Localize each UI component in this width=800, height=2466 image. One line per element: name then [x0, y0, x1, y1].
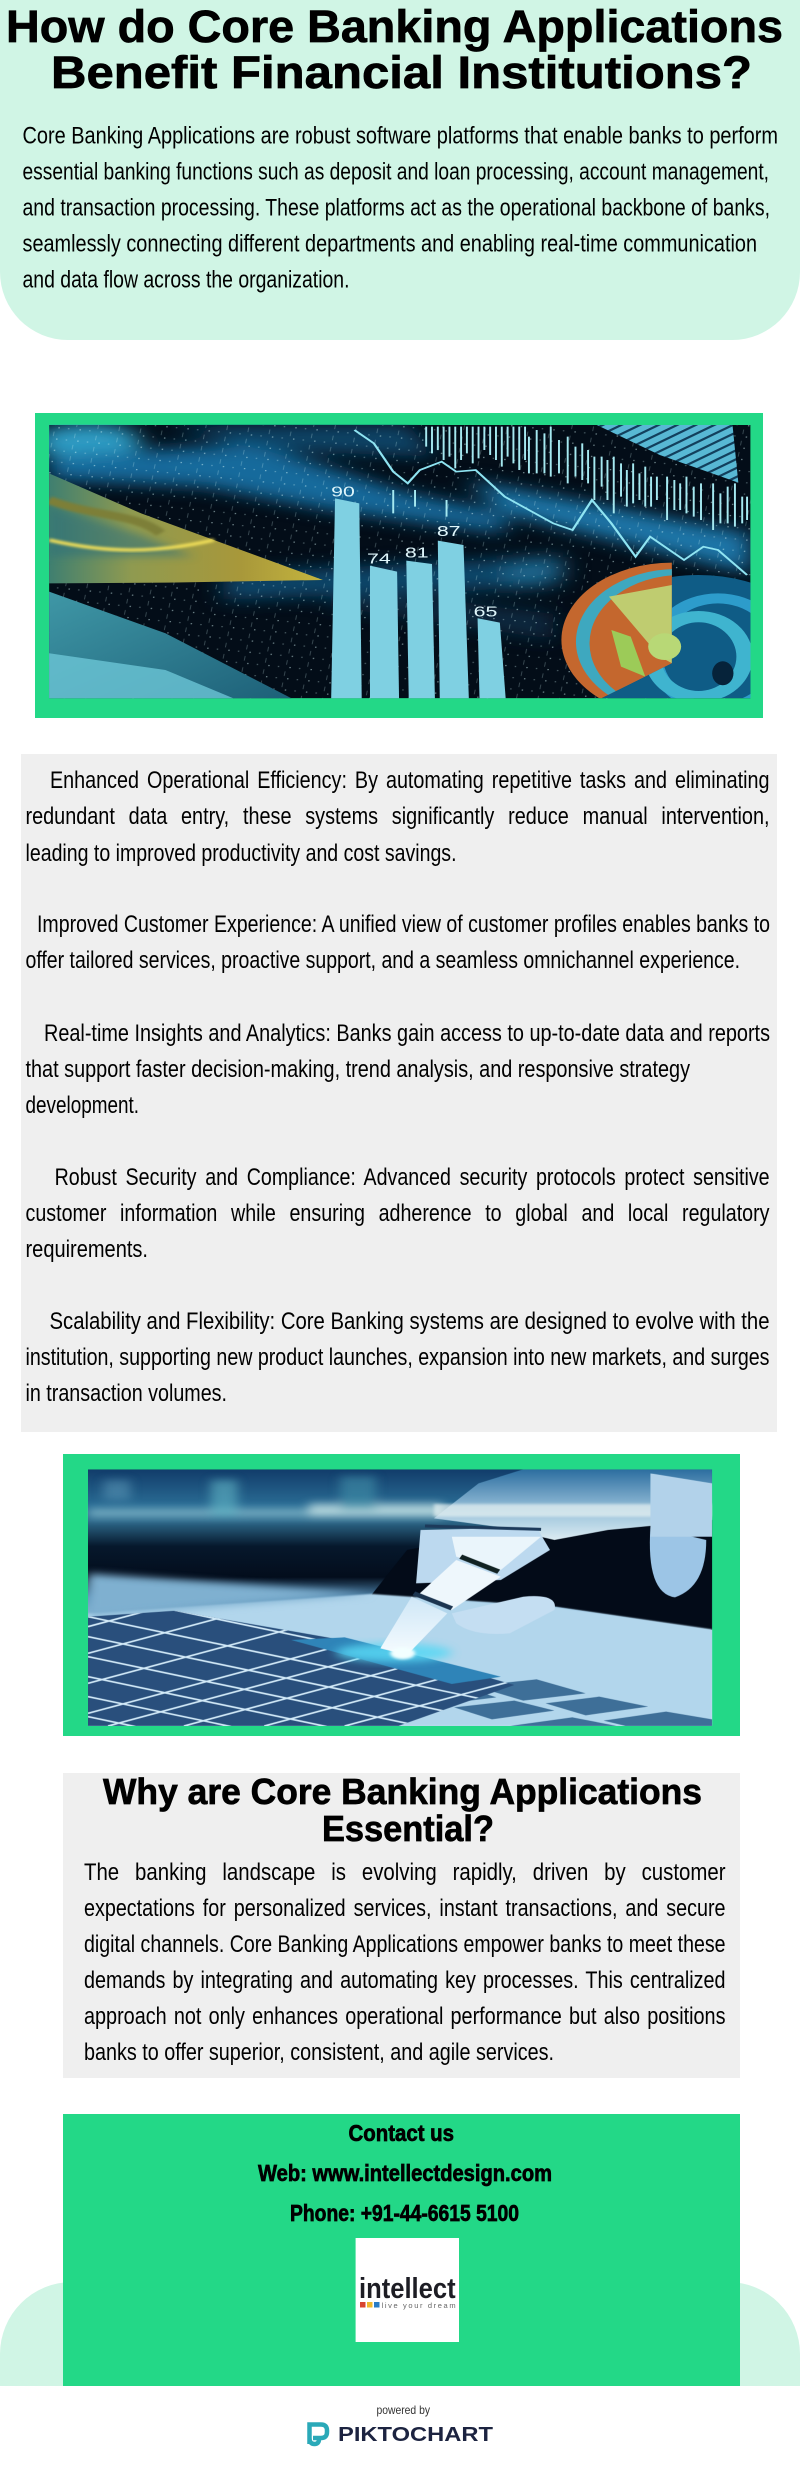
section heading: Why are Core Banking Applications: [103, 1771, 702, 1812]
contact text: Phone: +91-44-6615 5100: [290, 2200, 519, 2226]
section body: [84, 1859, 726, 2066]
benefit: security and compliance: [26, 1164, 770, 1263]
line chart: [354, 430, 747, 575]
grid dots: [49, 425, 750, 698]
powered by piktochart: PIKTOCHART: [338, 2424, 493, 2446]
benefit: security and compliance: requirements.: [26, 1236, 148, 1263]
dark backdrop behind hand: [371, 1520, 712, 1630]
bar labels: 81: [405, 544, 429, 561]
intro paragraph: [22, 122, 778, 294]
yellow wedge: [49, 473, 323, 583]
title: How do Core Banking Applications: [6, 1, 783, 52]
title: Benefit Financial Institutions?: [51, 47, 752, 98]
image frame: financial charts: [35, 413, 800, 732]
hatched shape: [597, 425, 738, 483]
bar labels: [331, 483, 497, 620]
benefit: scalability and flexibility: [26, 1308, 770, 1407]
benefit: scalability and flexibility: in transaction volumes.: [26, 1380, 227, 1407]
benefit: insights and analytics: [26, 1020, 770, 1119]
benefits panel: [21, 754, 777, 1432]
intellect logo: intellect: [359, 2273, 456, 2305]
section heading: Essential?: [322, 1808, 494, 1849]
spikes: [393, 427, 747, 530]
bar labels: 65: [474, 603, 497, 620]
bokeh: [88, 1477, 445, 1518]
section body: banks to offer superior, consistent, and agile services.: [84, 2039, 554, 2066]
powered by piktochart: powered by: [376, 2403, 430, 2417]
intellect logo: live your dream: [382, 2301, 456, 2310]
robot hand: [380, 1469, 712, 1659]
footer mint background: [0, 2282, 800, 2386]
contact text: [258, 2120, 552, 2226]
icon: piktochart mark: [310, 2424, 327, 2444]
contact panel: [63, 2114, 740, 2386]
contact text: Contact us: [348, 2120, 454, 2146]
teal wedge: [49, 592, 291, 698]
contact text: Web: www.intellectdesign.com: [258, 2160, 552, 2186]
title: [6, 1, 783, 98]
bar labels: 90: [331, 483, 355, 500]
laptop deck: [88, 1594, 712, 1726]
intellect logo: [356, 2238, 459, 2342]
benefit: insights and analytics: development.: [26, 1092, 139, 1119]
bars: [331, 498, 506, 698]
benefit: operational efficiency: [26, 767, 770, 867]
powered by piktochart: [310, 2403, 493, 2446]
space bar glow: [291, 1637, 501, 1684]
header panel: [0, 0, 800, 340]
benefit: customer experience: [26, 911, 770, 974]
blurred streaks: [35, 423, 750, 640]
bar labels: 87: [437, 522, 461, 539]
benefit: operational efficiency: leading to improved productivity and cost savings.: [26, 840, 456, 867]
image frame: robot hand on laptop: [63, 1454, 740, 1736]
radar dial: [561, 562, 750, 698]
why essential panel: [63, 1771, 740, 2078]
keyboard: [88, 1610, 514, 1726]
bar labels: 74: [367, 550, 391, 567]
section heading: [103, 1771, 702, 1849]
large keys: [454, 1679, 712, 1726]
intro paragraph: and data flow across the organization.: [22, 266, 350, 294]
